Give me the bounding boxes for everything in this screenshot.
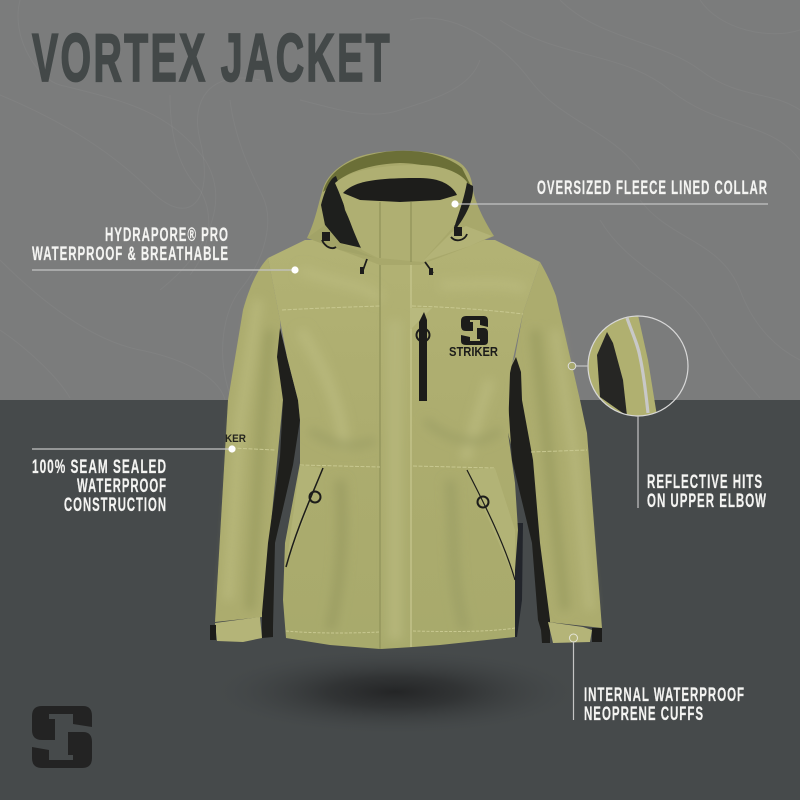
blue-black side panel (513, 523, 523, 637)
right black gusset (508, 357, 550, 643)
callout: hydrapore pro (32, 225, 299, 274)
left cuff (215, 617, 262, 642)
background: lower charcoal panel (0, 400, 800, 800)
left collar flap (307, 225, 375, 258)
hood lining left (321, 176, 362, 248)
background: upper grey panel (0, 0, 800, 400)
seam label line 1: 100% SEAM SEALED (32, 457, 167, 478)
yoke and waist seams (232, 306, 587, 468)
jacket illustration (210, 151, 602, 649)
seam leader line (32, 448, 232, 450)
seam dot (228, 445, 236, 453)
elbow leader line (637, 416, 639, 508)
hood shell (307, 151, 494, 265)
seam label line 3: CONSTRUCTION (64, 495, 167, 516)
callout: elbow detail magnifier (568, 310, 767, 512)
body fold shading (286, 328, 515, 638)
cord toggles (322, 227, 462, 275)
left sleeve (215, 258, 283, 622)
callout: oversized fleece lined collar (451, 178, 768, 208)
collar fold shading (380, 202, 411, 262)
collar leader line (455, 203, 768, 205)
right cuff tab (592, 628, 602, 642)
title: VORTEX JACKET (32, 20, 392, 96)
striker S logo (32, 706, 92, 768)
cuff leader line (572, 642, 574, 720)
right sleeve (508, 262, 602, 628)
elbow connector (576, 365, 588, 367)
hem stitch (286, 628, 515, 633)
jacket body (268, 240, 540, 649)
hood dark rim (323, 151, 473, 192)
chest wordmark: STRIKER (449, 344, 499, 359)
right cuff (548, 622, 592, 643)
left pocket opening (286, 468, 323, 567)
sleeve wordmark: KER (225, 433, 246, 445)
placket light seam (410, 260, 412, 647)
chest zipper (419, 312, 427, 401)
seam label line 2: WATERPROOF (77, 476, 167, 497)
left pocket flap shade (286, 465, 323, 567)
chest S mark (461, 316, 488, 345)
cuff label line 2: NEOPRENE CUFFS (584, 704, 704, 725)
right pocket opening (467, 470, 515, 580)
chest pocket flap (410, 308, 432, 330)
hood lining right (452, 182, 473, 230)
collar (335, 165, 467, 262)
hydrapore leader line (32, 269, 295, 271)
right collar flap (422, 226, 492, 262)
striker chest logo (449, 316, 499, 359)
hydrapore dot (291, 266, 299, 274)
callout: neoprene cuffs (570, 634, 745, 725)
placket seams (379, 260, 381, 649)
hood drawcords (322, 234, 467, 273)
right pocket flap shade (467, 468, 515, 580)
breathable label: WATERPROOF & BREATHABLE (32, 244, 229, 265)
neck opening fleece (343, 178, 457, 202)
sleeve shading (228, 300, 590, 610)
floor shadow (205, 648, 585, 736)
cuff marker (570, 634, 578, 642)
magnifier ring (588, 316, 688, 416)
chest zipper ring (416, 328, 430, 342)
left cuff tab (210, 625, 216, 640)
left black gusset (262, 328, 300, 638)
hydrapore label: HYDRAPORE® PRO (105, 225, 229, 246)
right pocket ring (478, 496, 488, 508)
magnifier content (588, 316, 656, 416)
collar dot (451, 200, 459, 208)
callout: seam sealed (32, 445, 236, 516)
left pocket ring (310, 492, 320, 502)
elbow marker (568, 362, 576, 370)
